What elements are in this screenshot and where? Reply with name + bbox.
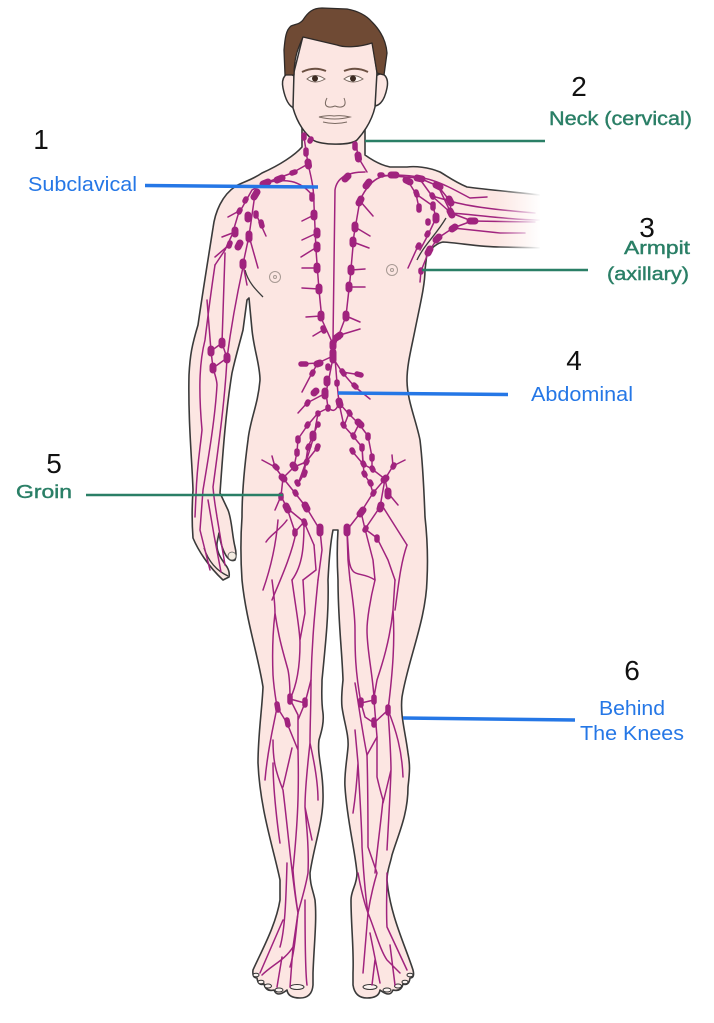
leader line: groin [86, 494, 283, 496]
hair [284, 8, 387, 75]
leader line: armpit [422, 269, 588, 271]
label 2: neck [549, 71, 692, 130]
label 3: armpit: 3 [639, 212, 655, 243]
knee and small nodes [229, 135, 433, 725]
label 3: armpit: (axillary) [607, 264, 689, 284]
right leg vessels [350, 580, 395, 755]
face [293, 36, 377, 144]
label 1: subclavical [28, 124, 137, 196]
lymphatic vessels [195, 137, 540, 987]
label 4: abdominal: 4 [566, 345, 582, 376]
arm fade overlay [495, 180, 541, 255]
label 5: groin: 5 [46, 448, 62, 479]
thumb nail [228, 552, 236, 560]
left leg vessels [272, 580, 318, 707]
label 6: behind the knees: The Knees [580, 723, 684, 745]
label 4: abdominal: Abdominal [531, 384, 633, 406]
label 2: neck: Neck (cervical) [549, 109, 692, 130]
label 6: behind the knees: 6 [624, 655, 640, 686]
toe nails [253, 973, 413, 992]
label 4: abdominal [531, 345, 633, 406]
label 6: behind the knees [580, 655, 684, 745]
label 3: armpit [607, 212, 690, 284]
body figure [189, 8, 548, 998]
leader line: knees [403, 718, 575, 720]
label 5: groin: Groin [16, 482, 72, 502]
leader line: neck [365, 140, 545, 142]
label 2: neck: 2 [571, 71, 587, 102]
facial features [302, 69, 368, 124]
large nodes [211, 155, 475, 533]
label 3: armpit: Armpit [624, 238, 690, 258]
label 6: behind the knees: Behind [599, 698, 665, 720]
ears [283, 74, 387, 108]
leader line: subclavical [145, 186, 318, 187]
thigh vessels [263, 520, 322, 600]
body outline [189, 125, 548, 998]
armpit and hand creases [204, 218, 446, 576]
label 5: groin [16, 448, 72, 502]
lymph nodes [211, 135, 475, 725]
label 1: subclavical: Subclavical [28, 174, 137, 196]
label 1: subclavical: 1 [33, 124, 49, 155]
nipples [270, 264, 398, 282]
leader line: abdominal [338, 393, 508, 394]
